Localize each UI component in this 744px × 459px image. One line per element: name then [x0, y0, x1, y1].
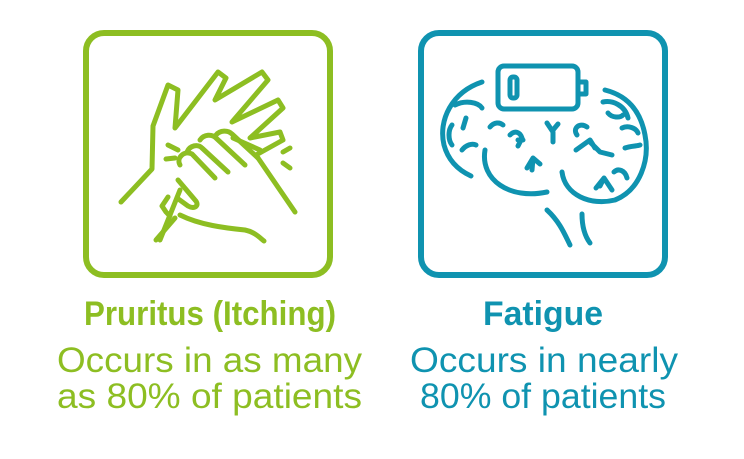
- text block: fatigue stat: [410, 341, 679, 416]
- panel: pruritus: [86, 33, 330, 275]
- heading: Fatigue: Fatigue: [483, 295, 603, 333]
- text block: pruritus stat: Occurs in as many: [57, 341, 363, 380]
- text block: fatigue stat: 80% of patients: [420, 377, 666, 416]
- icon: brain with low battery: [443, 66, 646, 245]
- heading: Pruritus (Itching): Pruritus (Itching): [84, 295, 336, 333]
- panel: fatigue: [421, 33, 665, 275]
- text block: pruritus stat: [57, 341, 363, 416]
- text block: pruritus stat: as 80% of patients: [57, 377, 362, 416]
- icon: scratching hands: [121, 72, 295, 241]
- text block: fatigue stat: Occurs in nearly: [410, 341, 679, 380]
